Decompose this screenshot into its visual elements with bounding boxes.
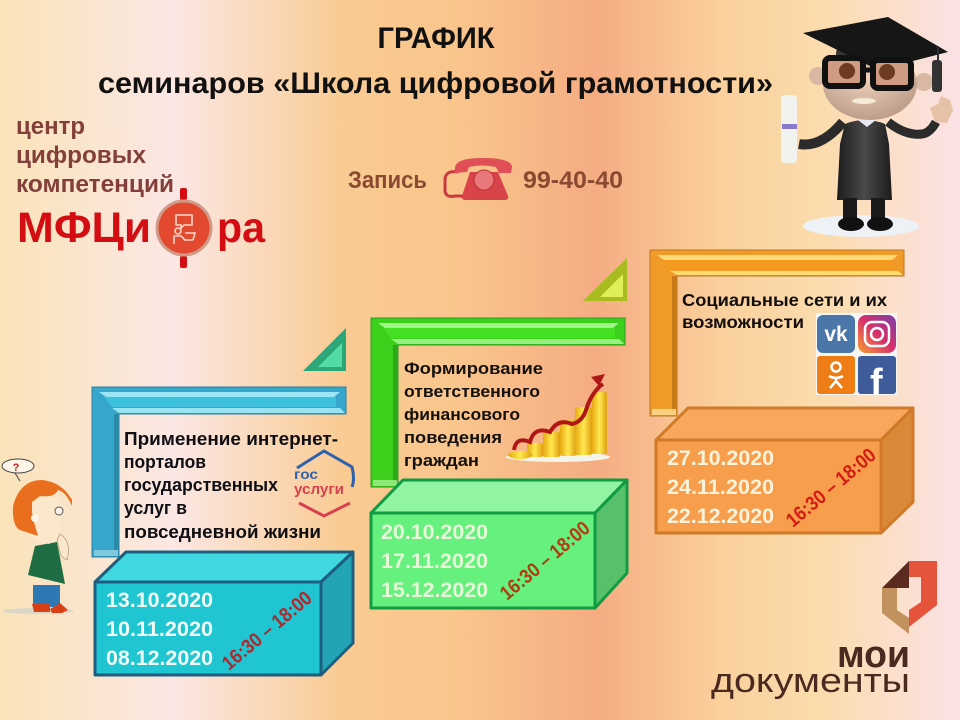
triangle marker [303, 328, 346, 371]
phone booking: Запись [348, 167, 427, 194]
title: семинаров «Школа цифровой грамотности» [98, 67, 773, 100]
heading text: Формирование [404, 359, 543, 378]
panel: step 1 internet portals [92, 328, 354, 675]
icon: gosuslugi logo: гос [294, 466, 318, 482]
date box [371, 480, 627, 608]
title [98, 22, 773, 100]
icon: thinking boy: ? [13, 462, 20, 474]
time: 16:30 – 18:00 [496, 517, 594, 605]
icon: facebook: f [870, 362, 883, 404]
green frame [371, 318, 625, 487]
dates: 17.11.2020 [381, 549, 488, 573]
heading text: ответственного [404, 382, 540, 401]
heading text: Применение интернет- [124, 429, 338, 449]
icon: social network icons [816, 313, 897, 404]
logo: moi dokumenty: мои [837, 634, 910, 676]
heading text: возможности [682, 312, 804, 332]
orange frame [650, 250, 904, 416]
dates [667, 446, 774, 528]
heading text: повседневной жизни [124, 522, 321, 542]
time: 16:30 – 18:00 [782, 444, 880, 532]
triangle marker [583, 258, 627, 301]
phone booking: 99-40-40 [523, 167, 623, 194]
centre of digital competence logo: ра [217, 204, 266, 252]
heading text: Социальные сети и их [682, 290, 887, 310]
icon: gosuslugi logo: услуги [294, 481, 344, 498]
icon: vk: vk [824, 323, 848, 346]
centre of digital competence logo: МФЦи [17, 204, 151, 252]
dates: 15.12.2020 [381, 578, 488, 602]
centre of digital competence logo: центр [16, 113, 85, 140]
logo: moi dokumenty: документы [711, 662, 910, 700]
icon: thinking boy [2, 459, 74, 614]
logo: moi dokumenty [711, 561, 937, 700]
dates: 13.10.2020 [106, 588, 213, 612]
dates: 27.10.2020 [667, 446, 774, 470]
centre of digital competence logo [16, 113, 266, 268]
date box [95, 552, 353, 675]
icon: red telephone [445, 158, 512, 200]
dates: 24.11.2020 [667, 475, 774, 499]
heading text [124, 429, 338, 542]
icon: odnoklassniki [817, 356, 855, 394]
heading text: поведения [404, 428, 502, 447]
icon: coin growth chart [506, 374, 610, 462]
date box [656, 408, 913, 533]
centre of digital competence logo: компетенций [16, 171, 174, 198]
panel: step 2 financial behaviour [371, 258, 627, 608]
heading text: порталов [124, 452, 206, 472]
dates [106, 588, 213, 670]
icon: gosuslugi logo [294, 451, 354, 516]
dates: 22.12.2020 [667, 504, 774, 528]
icon: instagram [858, 315, 896, 353]
centre of digital competence logo: цифровых [16, 142, 147, 169]
heading text: услуг в [124, 498, 187, 518]
dates [381, 520, 488, 602]
heading text: государственных [124, 475, 278, 495]
panel: step 3 social networks [650, 250, 913, 533]
dates: 20.10.2020 [381, 520, 488, 544]
heading text: финансового [404, 405, 520, 424]
dates: 08.12.2020 [106, 646, 213, 670]
heading text [404, 359, 543, 470]
blue frame [92, 387, 346, 557]
title: ГРАФИК [378, 22, 495, 55]
time: 16:30 – 18:00 [218, 587, 316, 675]
heading text: граждан [404, 451, 479, 470]
heading text [682, 290, 887, 332]
icon: graduate character [781, 17, 953, 237]
phone booking [348, 158, 623, 200]
dates: 10.11.2020 [106, 617, 213, 641]
